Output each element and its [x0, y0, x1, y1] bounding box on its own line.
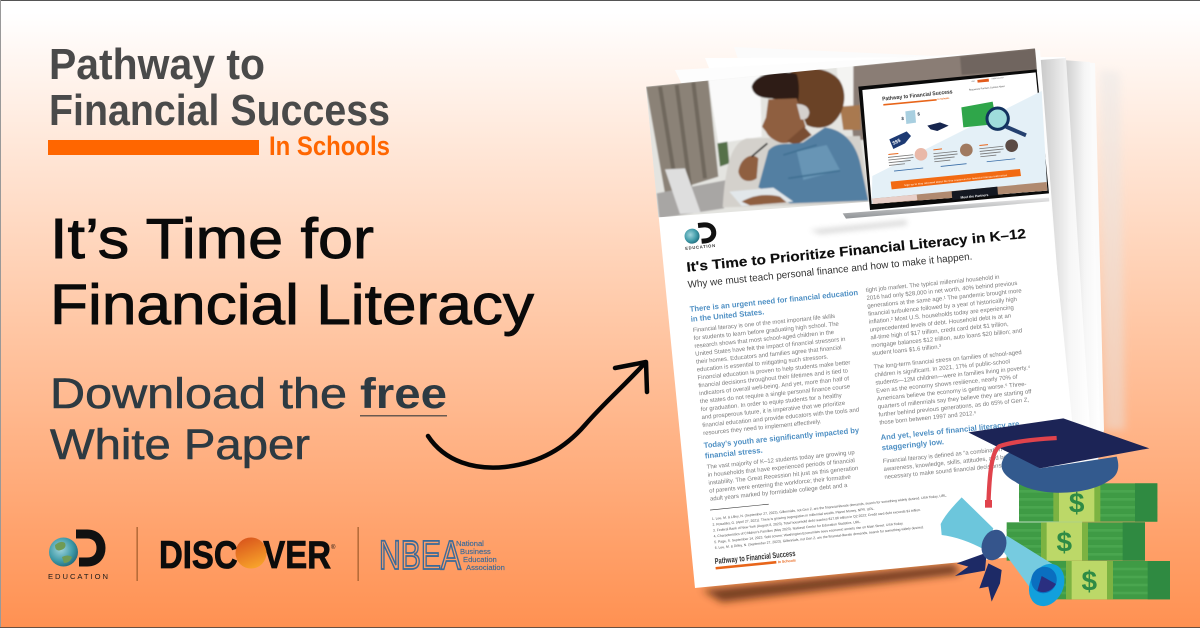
call to action text: [50, 370, 447, 469]
doc footer logo: [714, 549, 797, 570]
column 2: student loans $1.6 trillion.³: [872, 344, 941, 357]
column 2: staggeringly low.: [881, 437, 944, 452]
website orange button: Sign up to stay informed about the free resources for financial literacy instruction: [904, 174, 1008, 187]
column 2: further behind previous generations, as do 65% of Gen Z,: [878, 397, 1030, 418]
column 1: Today's youth are significantly impacted by: [703, 425, 860, 450]
money stack middle: [1007, 522, 1145, 561]
diploma: [941, 497, 1071, 612]
column 2: financial turbulence followed by a year of historically high: [868, 297, 1017, 318]
column 2: Financial literacy is defined as “a combination of: [883, 446, 1009, 465]
column 2: those born between 1997 and 2012.⁶: [879, 410, 977, 426]
logo: Pathway to Financial Success In Schools: Financial Success: [49, 86, 390, 135]
footnotes: [712, 494, 950, 550]
column 1: Financial literacy is one of the most important life skills: [693, 314, 835, 334]
money stack bottom: $: [1082, 565, 1098, 596]
website nav: NBEA Education: [991, 76, 1004, 80]
doc title: It's Time to Prioritize Financial Literacy in K–12: [686, 226, 1027, 275]
money stack bottom: [1032, 561, 1170, 599]
column 2: [866, 272, 1040, 481]
doc footer logo: Pathway to Financial Success: [714, 549, 796, 566]
column 1: United States have felt the impact of financial stressors in: [695, 337, 846, 358]
column 1: [689, 288, 878, 503]
column 2: all-time high of $17 trillion, credit card debt $1 trillion,: [870, 322, 1009, 341]
headline: It’s Time for: [50, 207, 374, 271]
headline: Financial Literacy: [50, 273, 535, 337]
website title: In Schools: [938, 98, 950, 101]
column 2: students—12M children—were in families living in poverty.⁴: [875, 364, 1031, 387]
column 2: And yet, levels of financial literacy are: [880, 419, 1020, 442]
column 2: necessary to make sound financial decisions: [884, 463, 1002, 481]
column 1: for graduation. In order to equip students for a healthy: [701, 393, 842, 413]
main page shadow: [702, 564, 960, 602]
money stack top: $: [1069, 488, 1085, 519]
logo: Pathway to Financial Success In Schools: In Schools: [269, 131, 390, 161]
logo: NBEA: NBEA: [379, 532, 461, 578]
website orange button: [891, 169, 1021, 189]
logo: NBEA: Education: [463, 555, 497, 564]
column 1: financial decisions throughout their lifetimes and is tied to: [698, 368, 849, 389]
column 2: inflation.² Most U.S. households today are experiencing: [869, 305, 1014, 326]
call to action text: Download the: [50, 370, 347, 418]
column 2: tight job market. The typical millennial household in: [866, 275, 1000, 294]
logo: Discover: DISCOVER: [159, 534, 331, 577]
footnotes: 5. Page, S. September 14, 2023. Split screen: Washington Economists sees economic anxiety rise on Main Street. USA Today.: [714, 521, 904, 544]
column 2: 2016 had only $28,000 in net worth, 40% behind previous: [866, 281, 1018, 302]
headline: [50, 207, 535, 337]
money stack middle: $: [1057, 527, 1073, 558]
laptop with website: Meet the Partners: [960, 193, 989, 200]
website illustration: receipt: $: [901, 116, 904, 121]
footnotes: 3. Federal Bank of New York (August 8, 2023). Total household debt reaches $17.06 trillion in Q2 2023; Credit card debt exceeds $1 trillion.: [713, 508, 921, 533]
column 2: quarters of millennials say they believe they are starting off: [878, 389, 1032, 411]
footnotes: 2. Rosalsky, G. (April 27, 2021). There is growing segregation in millennial wealth. Planet Money, NPR. URL.: [712, 507, 875, 527]
column 2: generations at the same age.¹ The pandemic brought more: [867, 288, 1023, 310]
column 2: awareness, knowledge, skills, attitudes, and behaviors: [883, 453, 1026, 473]
website illustration: price tag: [889, 131, 911, 149]
laptop with website: [810, 69, 1049, 234]
white paper main page: [640, 43, 1085, 588]
column 1: the states do not require a single personal finance course: [700, 384, 851, 405]
doc footer logo: In Schools: [778, 558, 796, 564]
column 1: in households that have experienced periods of financial: [707, 458, 855, 479]
column 1: Financial education is proven to help students make better: [697, 360, 851, 381]
logo: Discovery Education: EDUCATION: [48, 572, 108, 581]
doc logo: [683, 224, 715, 251]
arrow: [428, 362, 647, 468]
footnotes: 1. Lee, M. & Lilley, N. (September 27, 2023). Gillennials, not Gen Z, are the financial-literate demands, search for something widely desired. USA Today, URL.: [712, 494, 947, 521]
column 1: instability. The Great Recession hit just as this generation: [708, 466, 859, 487]
website title: Pathway to Financial Success: [882, 89, 953, 103]
money stack top: [1019, 483, 1157, 522]
website illustration: cap: [927, 122, 949, 131]
website illustration: receipt: $: [917, 111, 920, 116]
column 2: The long-term financial stress on families of school-aged: [874, 350, 1022, 371]
column 2: Even as the economy shows resilience, nearly 70% of: [876, 375, 1018, 395]
column 1: education is essential to mitigating such stressors.: [697, 354, 829, 374]
logo: NBEA: Business: [460, 547, 491, 556]
column 1: The vast majority of K–12 students today are growing up: [707, 450, 856, 471]
doc logo: EDUCATION: [685, 243, 715, 251]
stacked back pages: [675, 47, 1125, 540]
column 1: their homes. Educators and families agree that financial: [696, 345, 842, 366]
column 2: children is significant. In 2021, 17% of public-school: [874, 359, 1010, 379]
photo: student with headphones: [646, 48, 1038, 218]
call to action text: free: [360, 370, 447, 418]
column 1: financial stress.: [704, 446, 763, 460]
website illustration: price tag: $$$: [892, 138, 902, 147]
website resource columns: [888, 139, 1018, 171]
column 1: adult years marked by formidable college debt and a: [710, 483, 848, 503]
column 1: There is an urgent need for financial education: [689, 288, 859, 314]
column 2: mortgage balances $12 trillion, auto loans $20 billion; and: [871, 328, 1022, 349]
column 1: research shows that most school-aged children in the: [694, 330, 835, 350]
column 1: of parents were entering the workforce; their formative: [709, 475, 852, 495]
logo: NBEA: National: [456, 539, 484, 548]
website illustration: receipt: [901, 110, 920, 124]
column 1: in the United States.: [690, 307, 765, 324]
website illustration: money and magnifier: [961, 102, 1026, 135]
footnotes: 4. Characteristics of Children's Families (May 2023). National Center for Education Statistics. URL.: [713, 520, 861, 538]
column 1: for students to learn before graduating high school. The: [693, 321, 840, 342]
column 1: financial education and provide educators with the tools and: [702, 407, 859, 429]
logo: NBEA: Association: [466, 563, 505, 572]
website nav: Resources Partners Contact About: [969, 85, 1005, 92]
doc subtitle: Why we must teach personal finance and how to make it happen.: [687, 251, 973, 291]
illustration: money stacks, graduation cap and diploma: [941, 418, 1170, 612]
document body text: [681, 193, 1057, 570]
logo: Discovery Education: [48, 534, 108, 581]
logo: Discover: ®: [331, 544, 336, 551]
column 1: and prosperous future, it is imperative that we prioritize: [701, 401, 846, 421]
column 2: unprecedented levels of debt. Household debt is at an: [870, 313, 1011, 334]
footnotes: 6. Lee, M. & Dilley, N. (September 27, 2023). Gillennials, not Gen Z, are the financial-literate demands, search for something widely desired.: [715, 525, 924, 550]
website nav: [969, 76, 1005, 92]
graduation cap: [968, 418, 1149, 508]
column 1: indicators of overall well-being. And yet, more than half of: [699, 376, 850, 397]
logo: Pathway to Financial Success In Schools: [48, 40, 390, 161]
column 2: Americans believe the economy is getting worse.⁵ Three-: [877, 381, 1027, 403]
logo: Pathway to Financial Success In Schools: Pathway to: [49, 40, 265, 89]
call to action text: White Paper: [50, 421, 310, 469]
column 1: resources they need to implement effectively.: [703, 419, 822, 437]
website nav: USD: [971, 81, 976, 83]
